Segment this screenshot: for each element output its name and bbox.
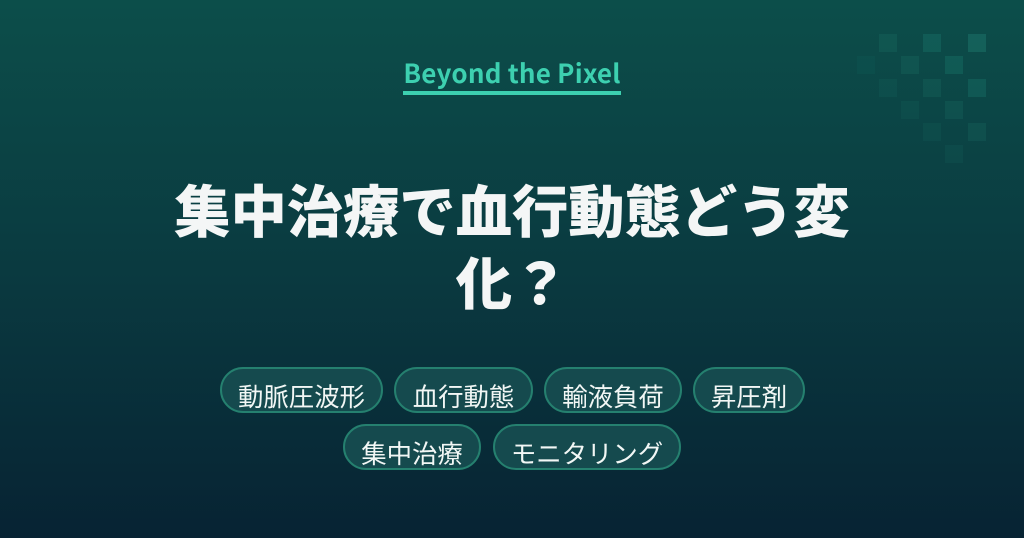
tag: 昇圧剤: 昇圧剤 (711, 378, 787, 414)
decorative pixel grid (879, 34, 986, 141)
tag: 集中治療: 集中治療 (361, 435, 463, 471)
tag: モニタリング (493, 424, 681, 470)
tag: 血行動態: 血行動態 (413, 378, 514, 414)
brand underline (403, 91, 621, 95)
tag: 動脈圧波形: 動脈圧波形 (238, 378, 365, 414)
tag: 輸液負荷: 輸液負荷 (562, 378, 664, 414)
tag: 昇圧剤 (693, 367, 805, 413)
title: 化？ (456, 240, 568, 321)
tag: 動脈圧波形 (220, 367, 383, 413)
tag: モニタリング: モニタリング (511, 435, 663, 471)
tag: 血行動態 (394, 367, 533, 413)
title (174, 168, 850, 321)
title: 集中治療で血行動態どう変 (174, 168, 850, 249)
tag: 輸液負荷 (544, 367, 682, 413)
brand label: Beyond the Pixel (403, 54, 621, 91)
tag: 集中治療 (343, 424, 481, 470)
